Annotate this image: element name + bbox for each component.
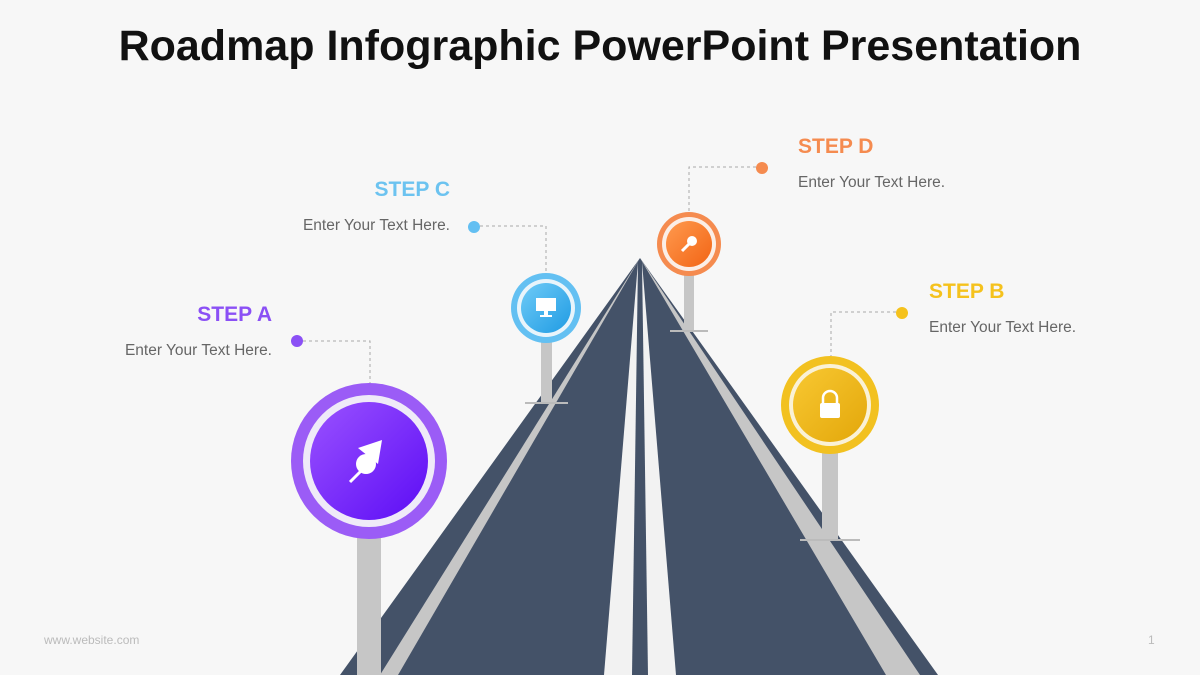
- step B text: Enter Your Text Here.: [929, 319, 1076, 336]
- step D text: STEP D: [798, 135, 873, 158]
- sign C: [468, 221, 581, 403]
- step D text: Enter Your Text Here.: [798, 174, 945, 191]
- sign B: [781, 307, 908, 540]
- sign D: [657, 162, 768, 331]
- step B text: STEP B: [929, 280, 1004, 303]
- step C text: [303, 178, 450, 234]
- step C text: STEP C: [375, 178, 450, 201]
- step A text: STEP A: [197, 303, 272, 326]
- sign A: [291, 335, 447, 675]
- icon: pin: [350, 440, 382, 482]
- road: [340, 258, 938, 675]
- title: Roadmap Infographic PowerPoint Presentation: [119, 22, 1081, 70]
- page number: 1: [1148, 633, 1155, 647]
- step C text: Enter Your Text Here.: [303, 217, 450, 234]
- step B text: [929, 280, 1076, 336]
- step D text: [798, 135, 945, 191]
- step A text: [125, 303, 272, 359]
- icon: lock: [820, 391, 840, 418]
- connector lines: [297, 167, 902, 384]
- step A text: Enter Your Text Here.: [125, 342, 272, 359]
- icon: monitor: [536, 298, 556, 317]
- icon: magnifier: [682, 236, 697, 251]
- footer website: www.website.com: [44, 633, 139, 647]
